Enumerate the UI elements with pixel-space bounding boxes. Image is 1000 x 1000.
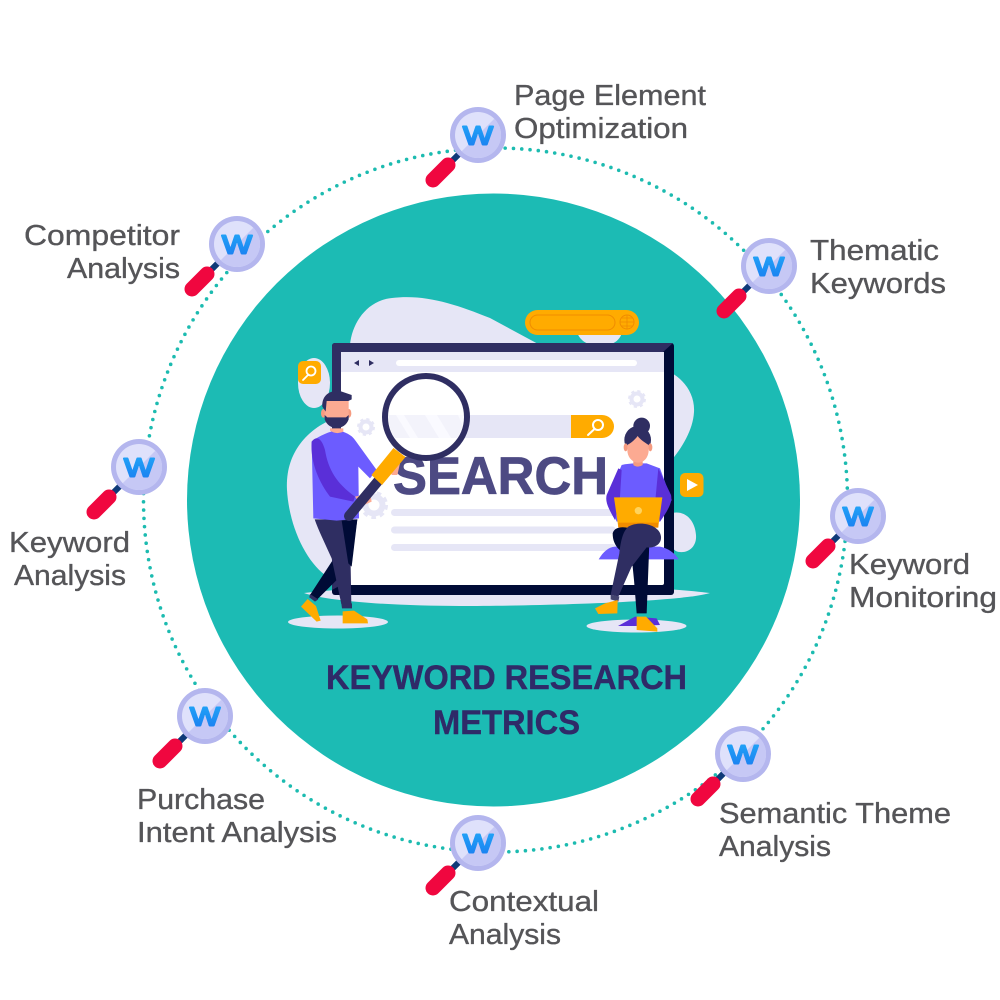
magnifier: Competitor Analysis	[192, 216, 265, 289]
dotted ring	[144, 148, 848, 852]
title: METRICS	[433, 704, 580, 742]
magnifier: Keyword Monitoring: W	[843, 502, 874, 532]
title: KEYWORD RESEARCH	[326, 659, 687, 697]
label: Contextual Analysis: Contextual	[449, 886, 599, 918]
search bar	[390, 415, 614, 438]
lavender background blobs	[287, 297, 710, 606]
label: Page Element Optimization: Optimization	[514, 113, 688, 145]
gears	[358, 392, 644, 517]
label: Semantic Theme Analysis: Semantic Theme	[719, 798, 951, 830]
search badge	[298, 361, 321, 384]
magnifier: Keyword Analysis: W	[124, 452, 155, 482]
label: Semantic Theme Analysis	[719, 798, 951, 863]
label: Keyword Monitoring: Keyword	[849, 549, 970, 581]
magnifier: Thematic Keywords: W	[754, 252, 785, 282]
play badge	[680, 473, 704, 497]
magnifier: Semantic Theme Analysis: W	[728, 740, 759, 770]
label: Thematic Keywords: Thematic	[810, 235, 939, 267]
label: Competitor Analysis: Competitor	[24, 220, 180, 252]
label: Semantic Theme Analysis: Analysis	[719, 831, 831, 863]
magnifier: Semantic Theme Analysis	[698, 726, 771, 799]
illustration: search scene	[287, 297, 710, 632]
magnifier: Page Element Optimization	[433, 107, 506, 180]
central teal circle	[187, 194, 800, 806]
label: Purchase Intent Analysis: Intent Analysis	[137, 817, 337, 849]
large magnifying glass	[349, 376, 468, 516]
magnifier: Contextual Analysis: W	[463, 828, 494, 858]
orange address pill	[525, 310, 639, 335]
man figure	[301, 391, 400, 623]
woman figure	[595, 418, 679, 632]
magnifier: Purchase Intent Analysis	[160, 688, 233, 761]
magnifier: Keyword Monitoring	[813, 488, 886, 561]
label: Keyword Analysis: Analysis	[14, 560, 126, 592]
magnifier: Keyword Analysis	[94, 439, 167, 512]
label: Keyword Analysis	[9, 527, 130, 592]
label: Keyword Monitoring: Monitoring	[849, 582, 997, 614]
magnifier: Competitor Analysis: W	[222, 230, 253, 260]
label: Page Element Optimization	[514, 80, 706, 145]
label: Thematic Keywords	[810, 235, 946, 300]
label: Keyword Analysis: Keyword	[9, 527, 130, 559]
magnifier: Purchase Intent Analysis: W	[190, 702, 221, 732]
shadows under figures	[288, 616, 686, 632]
label: Thematic Keywords: Keywords	[810, 268, 946, 300]
magnifier: Contextual Analysis	[433, 815, 506, 888]
label: Purchase Intent Analysis	[137, 784, 337, 849]
magnifier: Page Element Optimization: W	[463, 120, 494, 150]
label: Page Element Optimization: Page Element	[514, 80, 706, 112]
browser window	[332, 343, 674, 595]
label: Purchase Intent Analysis: Purchase	[137, 784, 265, 816]
label: Keyword Monitoring	[849, 549, 997, 614]
label: Competitor Analysis	[24, 220, 180, 285]
title	[326, 659, 687, 742]
label: Contextual Analysis: Analysis	[449, 919, 561, 951]
label: Competitor Analysis: Analysis	[67, 253, 180, 285]
magnifier: Thematic Keywords	[724, 238, 797, 311]
label: Contextual Analysis	[449, 886, 599, 951]
result lines	[391, 509, 616, 551]
SEARCH word: SEARCH	[393, 447, 608, 506]
